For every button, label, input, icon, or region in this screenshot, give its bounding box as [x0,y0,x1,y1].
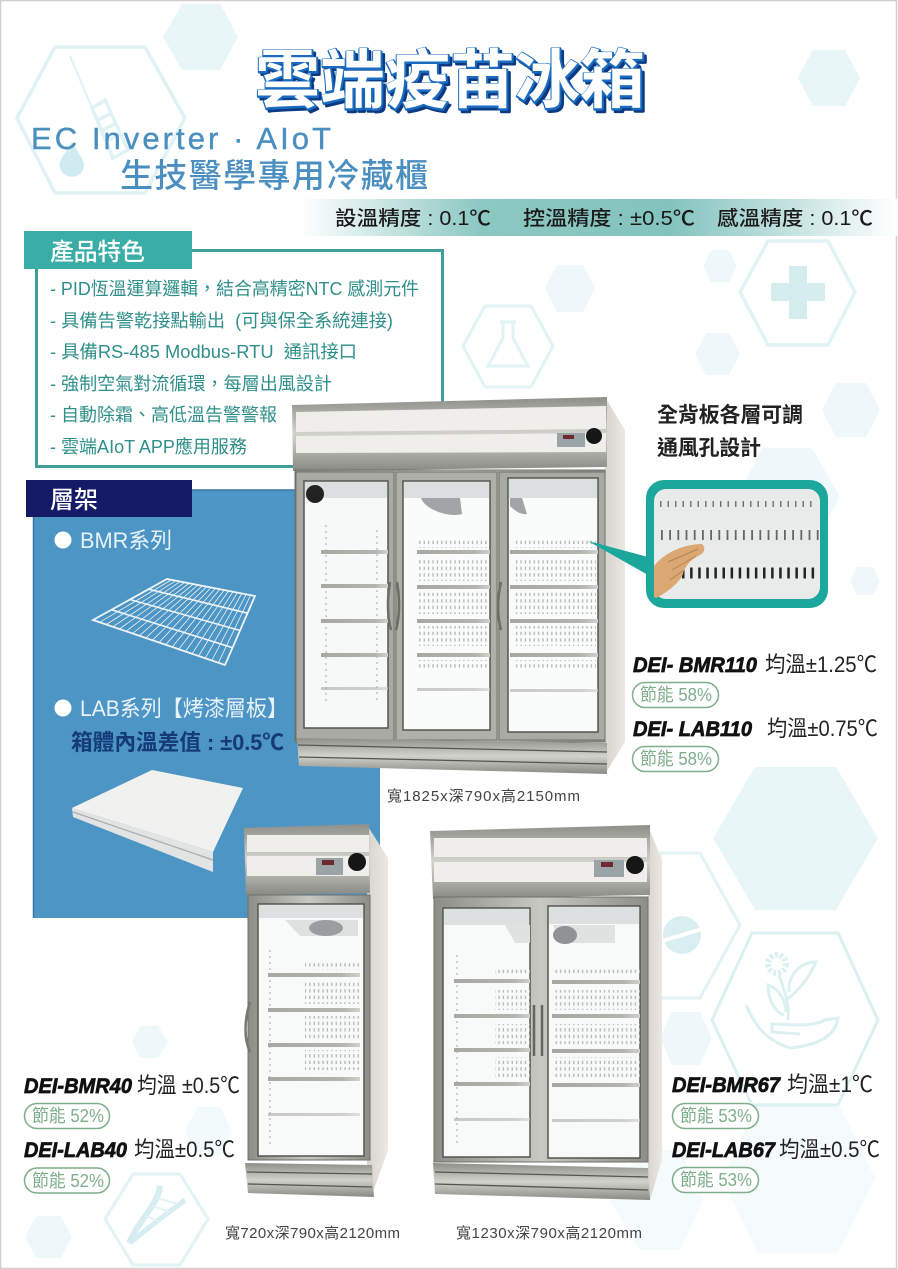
specs: BMR40 and LAB40: 均溫 ±0.5℃ [137,1073,240,1098]
glass and interior [304,478,598,732]
heading: shelves [26,480,192,517]
hand [654,544,704,598]
fridge: single-door BMR40 / LAB40 [244,824,388,1197]
icon: pill hexagon [660,853,740,998]
specs: BMR67 and LAB67: DEI-BMR67 [672,1074,781,1097]
title: 雲端疫苗冰箱 [258,48,648,120]
specification band: 感溫精度 : 0.1℃ [717,207,873,230]
feature list: - 具備RS-485 Modbus-RTU 通訊接口 [50,342,357,362]
specs: BMR110 and LAB110: 均溫±0.75℃ [767,716,878,741]
badge [306,485,324,503]
specification band: 設溫精度 : 0.1℃ [335,207,491,230]
door handle [246,1002,250,1052]
header with controller [244,824,370,895]
glass and interior [443,906,640,1158]
heading: product features [24,231,192,269]
door frames [295,470,605,742]
title: 雲端疫苗冰箱 [256,46,646,118]
painted shelf [72,770,243,872]
temperature difference note: 箱體內溫差值 : ±0.5℃ [71,730,284,755]
specs: BMR67 and LAB67: 節能 53% [680,1106,752,1126]
specs: BMR110 and LAB110: 節能 58% [640,685,712,705]
specs: BMR110 and LAB110: 節能 58% [640,749,712,769]
specification band [300,199,898,236]
callout caption [657,403,803,460]
feature list: - 雲端AIoT APP應用服務 [50,436,247,457]
fridge: three-door BMR110 / LAB110 [292,397,625,774]
subtitle: biotech refrigerator: 生技醫學專用冷藏櫃 [120,157,428,194]
dimensions: three-door: 寬1825x深790x高2150mm [387,787,580,805]
specs: BMR67 and LAB67: DEI-LAB67 [672,1139,776,1162]
callout caption: 通風孔設計 [657,437,761,460]
fridge: two-door BMR67 / LAB67 [430,825,662,1200]
dimensions: single-door: 寬720x深790x高2120mm [225,1224,400,1242]
header with controller [430,825,650,899]
specs: BMR110 and LAB110 [632,652,878,772]
callout: adjustable vent holes [588,480,828,608]
header with controller [292,397,607,471]
specs: BMR40 and LAB40: DEI-LAB40 [24,1139,127,1162]
icon: flower in hand hexagon [712,933,878,1105]
specs: BMR40 and LAB40: 節能 52% [32,1106,104,1126]
icon: DNA hexagon [105,1174,208,1265]
door handles [388,582,501,630]
specs: BMR110 and LAB110: 均溫±1.25℃ [765,652,877,677]
feature list: - 強制空氣對流循環，每層出風設計 [50,374,332,394]
LAB series label: LAB系列【烤漆層板】 [80,696,288,721]
specs: BMR40 and LAB40: 均溫±0.5℃ [134,1137,235,1162]
specs: BMR67 and LAB67 [672,1072,880,1192]
door frame [248,895,370,1160]
feature list: - 具備告警乾接點輸出 (可與保全系統連接) [50,311,393,331]
panel: shelves [26,480,380,918]
specs: BMR40 and LAB40: DEI-BMR40 [24,1075,132,1098]
specs: BMR40 and LAB40 [24,1073,240,1193]
BMR series label: BMR系列 [80,528,172,553]
feature list: - 自動除霜、高低溫告警警報 [50,405,277,425]
specs: BMR67 and LAB67: 均溫±0.5℃ [779,1137,880,1162]
specification band: 控溫精度 : ±0.5℃ [523,207,695,230]
wire shelf [93,579,255,665]
base [245,1163,374,1197]
door frames [434,897,648,1162]
dimensions: two-door: 寬1230x深790x高2120mm [456,1224,642,1242]
feature list [50,278,419,457]
door handles [534,1005,542,1056]
heading: product features: 產品特色 [50,239,145,266]
specs: BMR110 and LAB110: DEI- BMR110 [633,654,757,677]
base [433,1163,650,1200]
base [297,738,607,774]
title: 雲端疫苗冰箱 [255,44,645,116]
panel: product features [24,231,442,466]
icon: flask hexagon [463,306,553,387]
specs: BMR40 and LAB40: 節能 52% [32,1171,104,1191]
heading: shelves: 層架 [50,487,98,514]
specs: BMR67 and LAB67: 均溫±1℃ [787,1072,873,1097]
icon: syringe hexagon [17,47,185,193]
subtitle: EC Inverter AIoT: EC Inverter · AIoT [31,121,331,156]
icon: medical plus hexagon [740,241,855,345]
specs: BMR67 and LAB67: 節能 53% [680,1170,752,1190]
feature list: - PID恆溫運算邏輯，結合高精密NTC 感測元件 [50,278,419,299]
glass and interior [258,904,364,1156]
callout caption: 全背板各層可調 [657,403,803,427]
specs: BMR110 and LAB110: DEI- LAB110 [633,718,752,741]
